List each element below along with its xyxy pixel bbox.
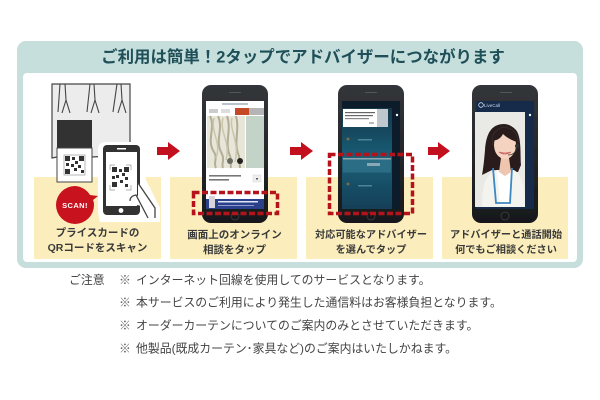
note 3: ※ xyxy=(119,318,131,332)
arrow 1 xyxy=(157,142,180,160)
icon: curtain with price card xyxy=(52,84,130,182)
phone: adviser list xyxy=(338,85,404,223)
step 2 caption box: 画面上のオンライン xyxy=(187,228,282,241)
curtain pattern image xyxy=(207,116,264,168)
step 4 caption box: 何でもご相談ください xyxy=(455,243,557,256)
popup dialog xyxy=(343,109,377,127)
panel: service steps xyxy=(17,41,583,268)
phone: video call xyxy=(472,85,538,223)
icon: SCAN badge: SCAN! xyxy=(62,201,88,210)
phone: video call: LiveCall xyxy=(484,103,500,108)
notes block xyxy=(69,273,502,356)
highlight: banner tap target xyxy=(194,192,278,214)
note 4: ※ xyxy=(119,342,131,356)
note 2: 本サービスのご利用により発生した通信料はお客様負担となります。 xyxy=(136,296,502,310)
note 1: インターネット回線を使用してのサービスとなります。 xyxy=(136,273,431,287)
heading: ご利用は簡単！2タップでアドバイザーにつながります xyxy=(101,48,505,66)
highlight: adviser tap target xyxy=(330,154,412,214)
arrow 2 xyxy=(290,142,313,160)
step 1 caption box: プライスカードの xyxy=(56,227,139,239)
step 3 caption box xyxy=(306,177,433,259)
step 1 caption box xyxy=(34,177,161,259)
QR code on card xyxy=(64,155,85,175)
note 2: ※ xyxy=(119,296,131,310)
step 2 caption box xyxy=(170,177,297,259)
phone: product page xyxy=(202,85,268,223)
online consultation banner xyxy=(206,196,264,209)
step 2 caption box: 相談をタップ xyxy=(203,243,266,256)
hand xyxy=(130,183,155,218)
note 4: 他製品(既成カーテン･家具など)のご案内はいたしかねます。 xyxy=(136,342,457,356)
icon: phone scanning QR with hand xyxy=(98,142,160,222)
arrow 3 xyxy=(428,142,450,160)
note 1: ※ xyxy=(119,273,131,287)
adviser photo xyxy=(475,112,525,207)
step 4 caption box xyxy=(442,177,568,259)
note 3: オーダーカーテンについてのご案内のみとさせていただきます。 xyxy=(136,318,478,332)
notes label: ご注意 xyxy=(69,273,105,287)
step 4 caption box: アドバイザーと通話開始 xyxy=(450,228,563,241)
step 1 caption box: QRコードをスキャン xyxy=(48,242,147,254)
QR code on phone xyxy=(110,165,131,190)
step 3 caption box: を選んでタップ xyxy=(336,243,406,256)
icon: SCAN badge xyxy=(56,186,98,224)
step 3 caption box: 対応可能なアドバイザー xyxy=(315,228,427,241)
